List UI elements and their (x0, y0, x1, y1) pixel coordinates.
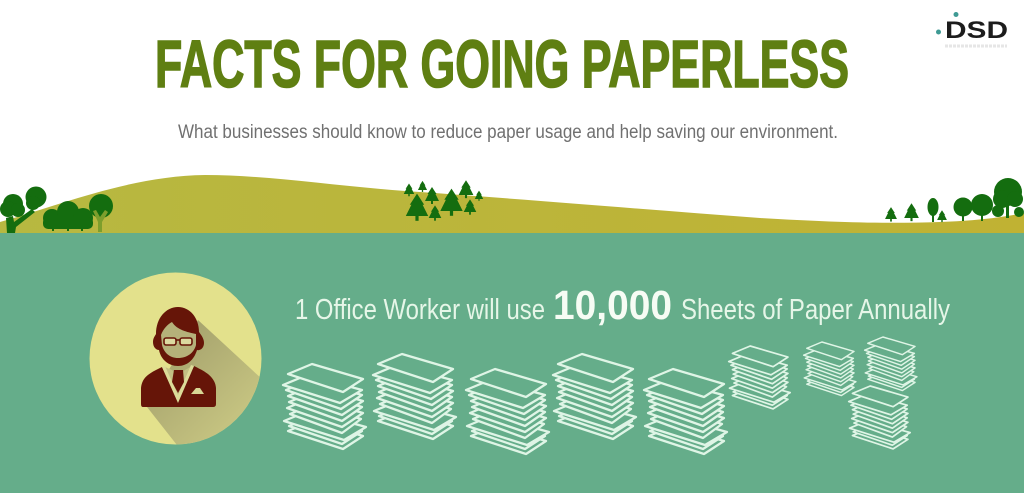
headline: sheets per year (295, 282, 950, 328)
paper stacks (283, 337, 917, 454)
logo wordmark: DSD (945, 17, 1008, 44)
big number: 10,000 (553, 282, 672, 328)
subtitle: What businesses should know to reduce paper usage and help saving our environment. (178, 122, 838, 143)
headline: sheets per year: 1 Office Worker will use (295, 294, 545, 326)
icon: office worker in circle (90, 272, 262, 444)
trees: left group (0, 186, 113, 233)
long shadow (147, 320, 260, 444)
headline end: Sheets of Paper Annually (681, 294, 950, 326)
trees: right group (885, 178, 1024, 222)
worker figure (141, 307, 216, 407)
tree trunk (93, 210, 108, 232)
teal ground panel (0, 233, 1024, 493)
badge circle (90, 272, 262, 444)
logo: DSD (936, 12, 1008, 46)
hill landscape (0, 175, 1024, 234)
trees: centre pines (404, 180, 483, 221)
